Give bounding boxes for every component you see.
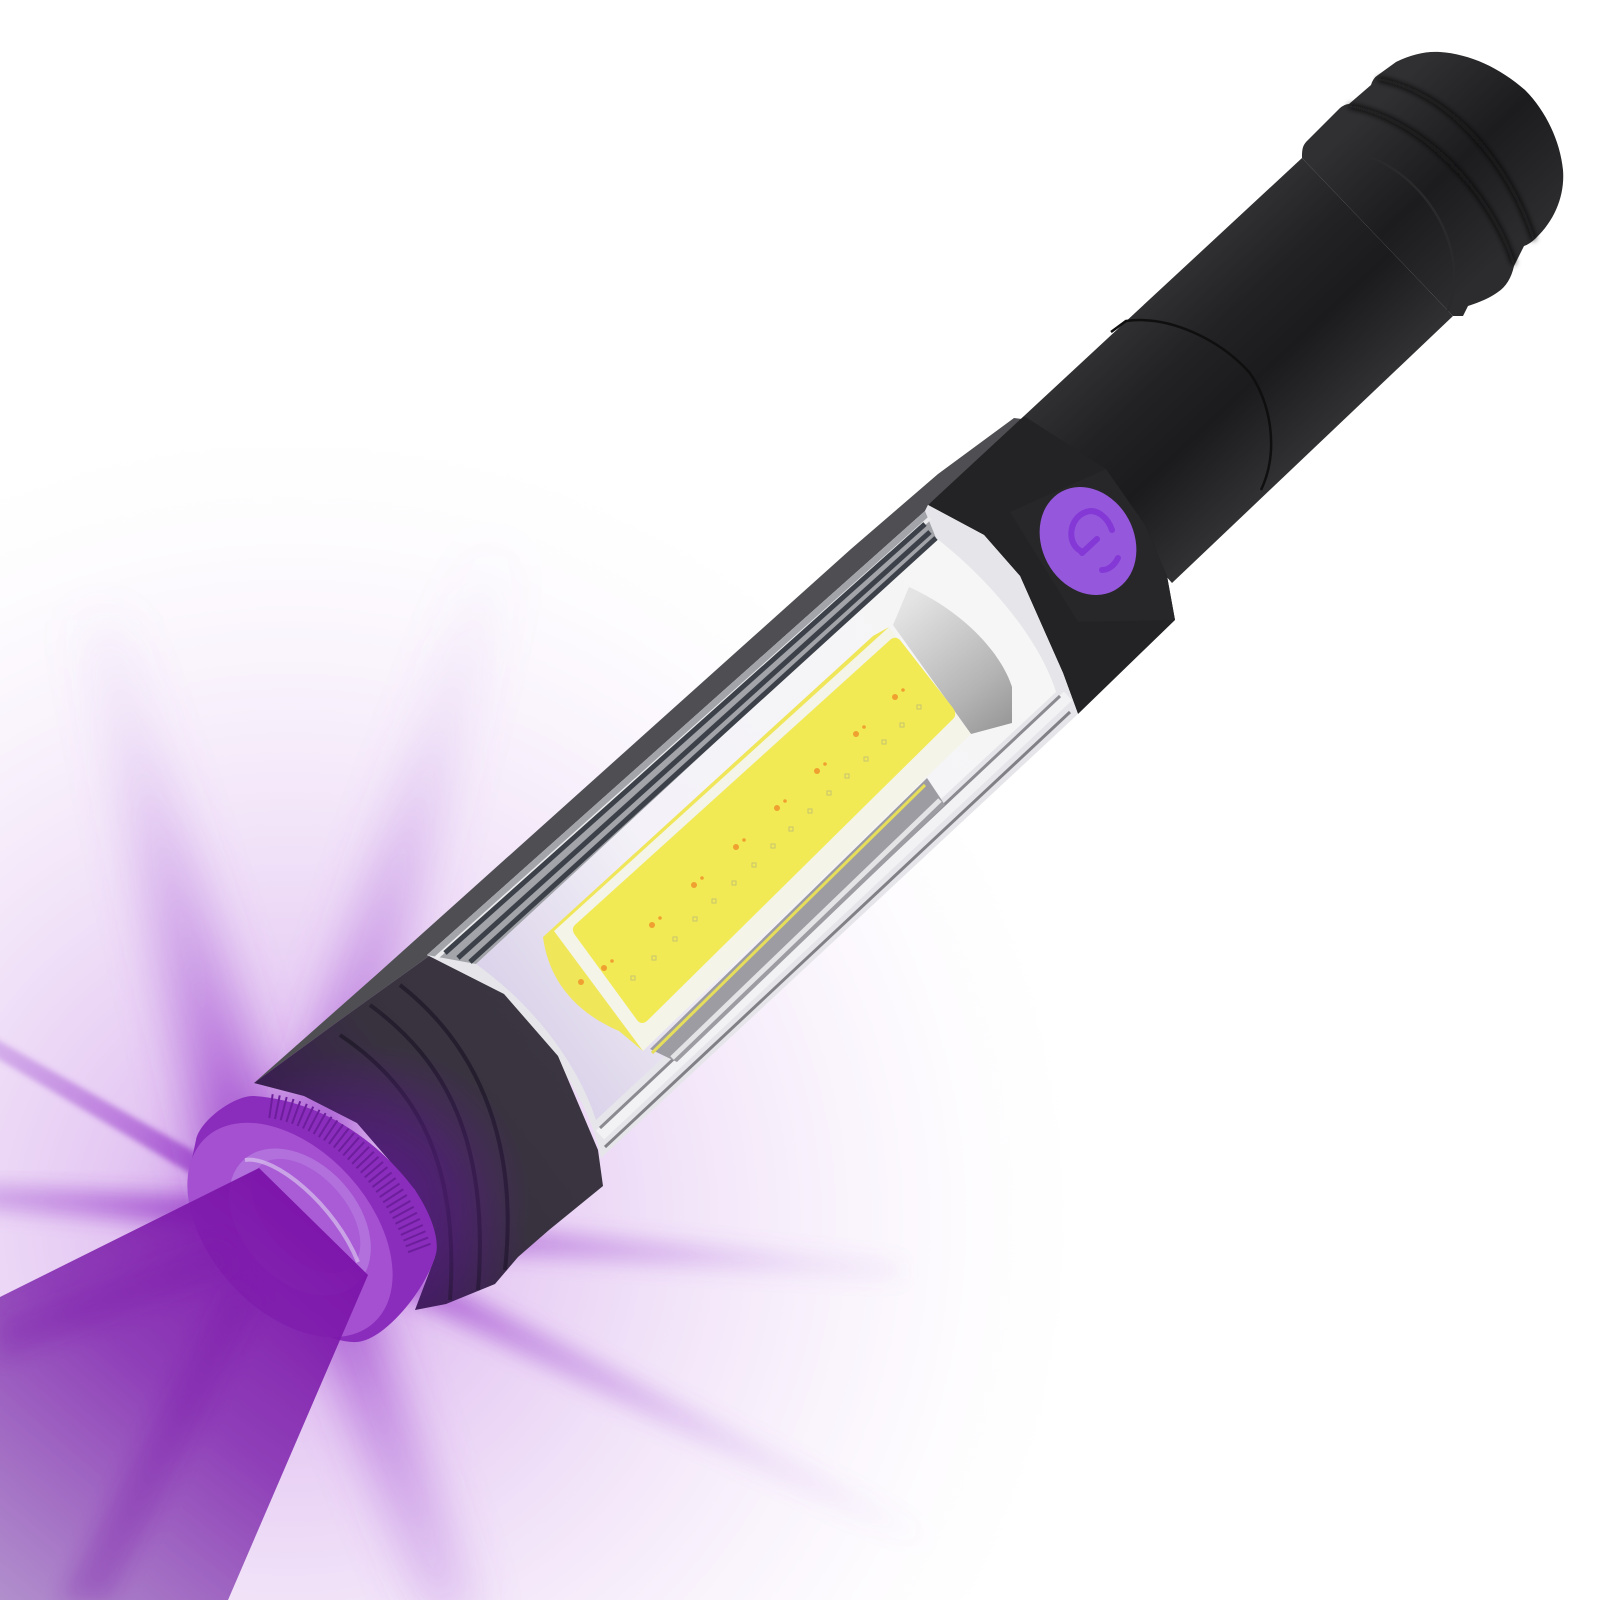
- ray: up right: [270, 540, 520, 1200]
- LED panel lower sliver: [652, 785, 925, 1053]
- power icon: [1071, 511, 1118, 570]
- LED panel frame: [554, 627, 971, 1051]
- barrel tube: [1024, 158, 1453, 583]
- clear LED housing: [427, 505, 1078, 1158]
- chrome band highlight: [672, 800, 940, 1058]
- housing ridges: [445, 524, 936, 962]
- COB LED yellow: [573, 638, 955, 1023]
- lens: [201, 1121, 399, 1323]
- chrome band below LED panel: [650, 778, 945, 1062]
- lens ring side: [190, 1096, 437, 1342]
- housing window: [476, 538, 1056, 1120]
- lens highlight: [245, 1160, 358, 1262]
- ray: down: [280, 1230, 480, 1600]
- collar: [928, 416, 1175, 714]
- button body: [1021, 470, 1155, 612]
- rear end cap: [1302, 52, 1563, 316]
- upper ridge band: [427, 511, 936, 964]
- head UV tint: [293, 1058, 514, 1310]
- housing edge highlight: [436, 518, 930, 958]
- beam ray left: [0, 1240, 240, 1360]
- LED panel back sliver: [543, 627, 889, 1051]
- barrel seams: [1111, 158, 1454, 490]
- UV beam: [0, 1168, 368, 1600]
- ray: upper left thin: [0, 1030, 280, 1215]
- ray: up left: [80, 620, 300, 1220]
- flashlight: [147, 52, 1563, 1376]
- lens inner: [231, 1139, 381, 1293]
- front head: [254, 956, 603, 1310]
- rays inside beam: [0, 1240, 260, 1600]
- beam ray lower: [60, 1280, 260, 1600]
- chrome reflector: [893, 587, 1012, 734]
- ray: left horizontal: [0, 1185, 280, 1232]
- cap ridges: [1349, 79, 1534, 264]
- rear grey side of body: [254, 418, 1030, 1083]
- head grooves: [340, 985, 508, 1300]
- LED pads: [631, 705, 921, 980]
- LED dots: [578, 688, 905, 985]
- collar facet: [1010, 469, 1175, 622]
- ring front face: [147, 1084, 433, 1376]
- ring knurling: [270, 1106, 420, 1250]
- ray: right: [290, 1210, 900, 1280]
- lower housing ridges: [600, 696, 1070, 1147]
- power button: [1021, 470, 1155, 612]
- ray: lower right: [280, 1205, 1050, 1600]
- light rays: [0, 540, 1050, 1600]
